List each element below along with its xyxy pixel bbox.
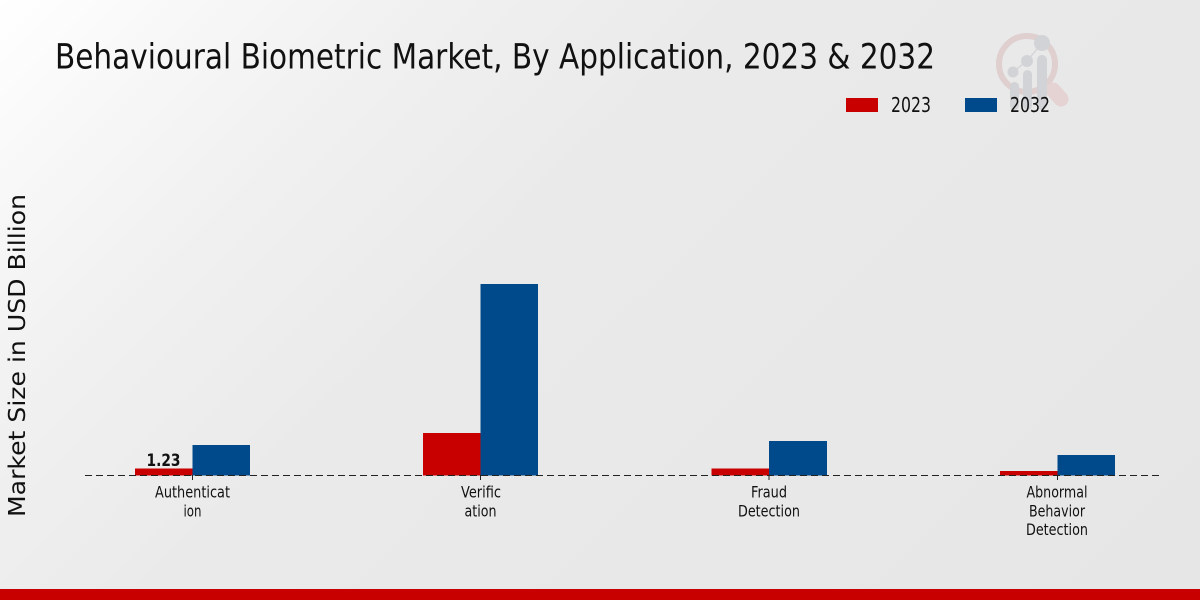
label: Verification: ation — [464, 502, 496, 520]
group: Authentication: 1.23 — [146, 451, 180, 471]
y axis label: Market Size in USD Billion — [5, 194, 31, 517]
label: Abnormal Behavior Detection: Detection — [1026, 520, 1088, 539]
legend — [846, 93, 1050, 117]
legend item: 2032: 2032 — [1010, 93, 1050, 117]
title: Behavioural Biometric Market, By Application, 2023 & 2032 — [55, 38, 935, 78]
label: Verification — [461, 482, 501, 520]
label: Verification: Verific — [461, 482, 501, 502]
legend item: 2032 — [965, 93, 1050, 117]
label: Authentication: Authenticat — [155, 482, 230, 502]
legend item: 2023: 2023 — [891, 93, 931, 117]
group: Authentication — [135, 445, 250, 476]
legend item: 2023 — [846, 93, 931, 117]
label: Abnormal Behavior Detection: Behavior — [1029, 502, 1085, 520]
label: Abnormal Behavior Detection: Abnormal — [1026, 482, 1088, 502]
label: Fraud Detection: Fraud — [751, 482, 787, 502]
label: Authentication: ion — [184, 502, 202, 520]
x axis labels — [155, 482, 1088, 539]
group: Verification — [423, 284, 538, 476]
label: Fraud Detection: Detection — [738, 502, 800, 520]
label: Authentication — [155, 482, 230, 520]
x axis baseline — [85, 475, 1163, 480]
group: Fraud Detection — [712, 441, 827, 476]
footer bar — [0, 589, 1200, 600]
label: Abnormal Behavior Detection — [1026, 482, 1088, 539]
group: Abnormal Behavior Detection — [1000, 455, 1115, 476]
icon: watermark logo — [999, 35, 1061, 110]
bar chart — [135, 284, 1115, 476]
label: Fraud Detection — [738, 482, 800, 520]
